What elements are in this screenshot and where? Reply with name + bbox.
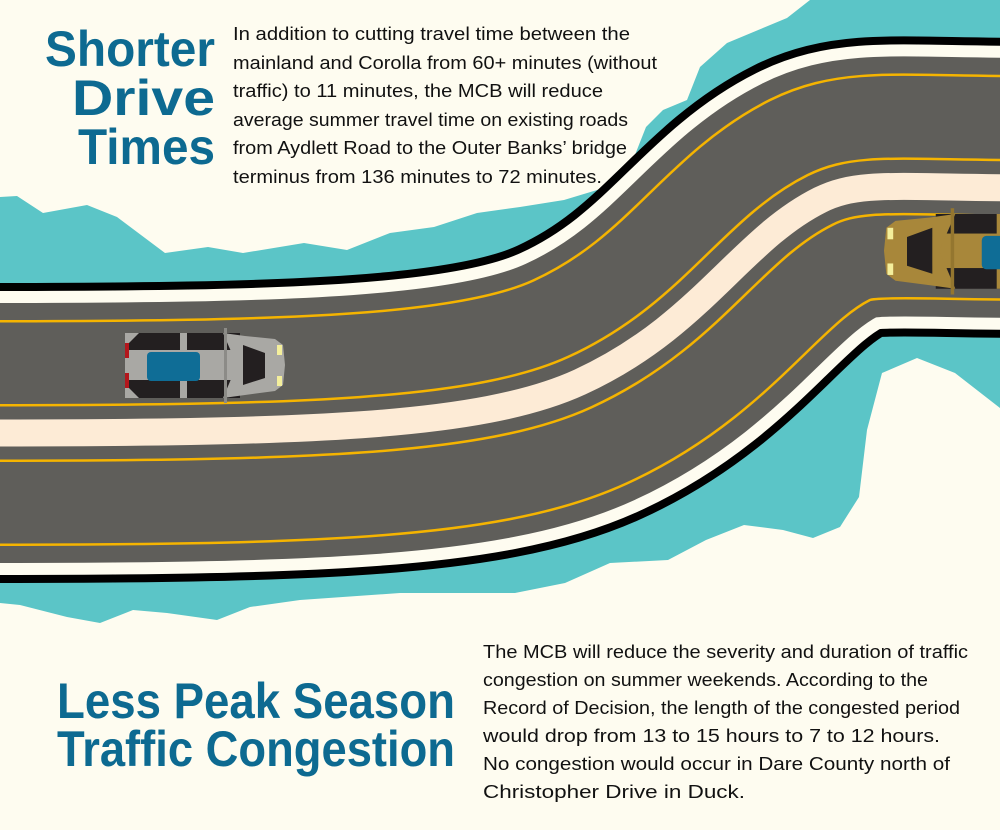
text block: congestion: [482, 642, 968, 802]
teal water bottom: [0, 250, 1000, 623]
text block: drive times: [233, 24, 657, 187]
text block: drive times: from Aydlett Road to the Outer Banks’ bridge: [233, 138, 627, 158]
car: gold: [884, 208, 1000, 294]
title: Shorter Drive Times: Drive: [72, 70, 215, 126]
road: [0, 186, 1000, 433]
text block: congestion: congestion on summer weekends. According to the: [483, 670, 928, 690]
car: gray: [125, 328, 285, 403]
title: Less Peak Season Traffic Congestion: [57, 673, 455, 777]
text block: drive times: average summer travel time on existing roads: [233, 110, 628, 130]
title: Shorter Drive Times: [45, 21, 215, 175]
text block: congestion: The MCB will reduce the severity and duration of traffic: [483, 642, 968, 662]
text block: congestion: Record of Decision, the length of the congested period: [483, 698, 960, 718]
text block: drive times: terminus from 136 minutes to 72 minutes.: [233, 167, 602, 187]
text block: drive times: In addition to cutting travel time between the: [233, 24, 630, 44]
title: Shorter Drive Times: Shorter: [45, 21, 215, 77]
teal water top: [0, 0, 1000, 330]
text block: drive times: mainland and Corolla from 60+ minutes (without: [233, 53, 657, 73]
text block: congestion: would drop from 13 to 15 hours to 7 to 12 hours.: [482, 726, 940, 746]
title: Less Peak Season Traffic Congestion: Less Peak Season: [57, 673, 455, 729]
text block: congestion: No congestion would occur in Dare County north of: [483, 754, 951, 774]
title: Less Peak Season Traffic Congestion: Traffic Congestion: [57, 721, 455, 777]
title: Shorter Drive Times: Times: [78, 119, 215, 175]
text block: congestion: Christopher Drive in Duck.: [483, 782, 745, 802]
text block: drive times: traffic) to 11 minutes, the MCB will reduce: [233, 81, 603, 101]
